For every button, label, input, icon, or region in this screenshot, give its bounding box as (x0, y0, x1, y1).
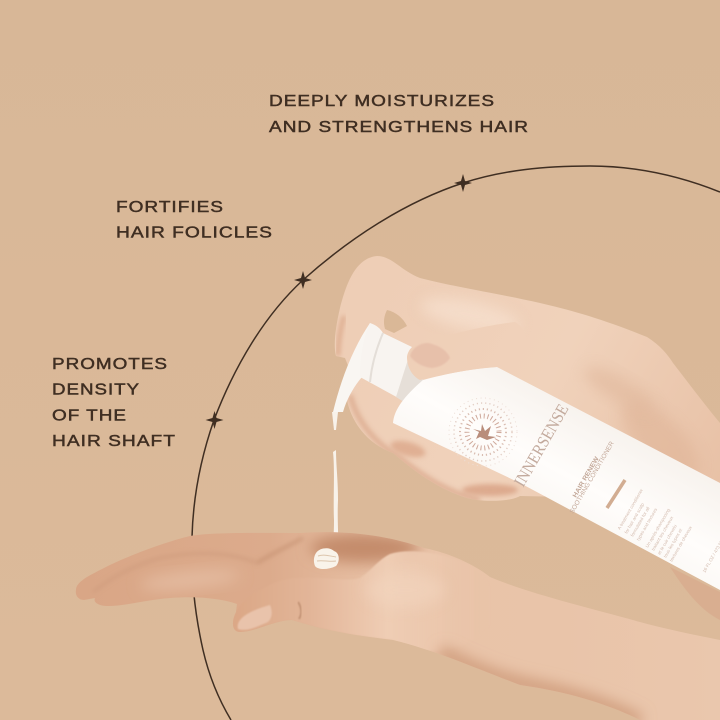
bottle description: A treatment conditioner (617, 487, 644, 530)
star marker: moisturizes (454, 174, 472, 192)
hand shading (424, 298, 514, 330)
bottle description: for hair and scalp (624, 502, 645, 534)
lower arm skin behind bottle (670, 567, 720, 620)
heading: promotes density: HAIR SHAFT (52, 433, 176, 450)
finger highlight (146, 568, 232, 592)
bottle description: et le cuir chevelu (657, 523, 678, 556)
arc line (192, 166, 720, 720)
logo flower (473, 424, 496, 440)
conditioner stream (332, 412, 338, 553)
heading: promotes density: DENSITY (52, 382, 140, 398)
heading: deeply moisturizes: AND STRENGTHENS HAIR (269, 119, 529, 136)
logo burst (449, 398, 517, 466)
upper hand holding bottle (335, 256, 720, 501)
heading: fortifies follicles (116, 199, 273, 242)
lower hand receiving conditioner (76, 532, 720, 720)
finger crease (93, 553, 257, 592)
conditioner bottle (333, 323, 720, 590)
palm shadow (310, 533, 420, 563)
bottle description (617, 487, 720, 574)
bottle description: Un après-shampooing (645, 507, 671, 548)
thumb and thenar mound (343, 550, 428, 646)
pump nozzle (333, 323, 376, 412)
bottle description: textures de cheveux (669, 524, 693, 562)
thumb nail (410, 343, 450, 368)
star marker: follicles (294, 271, 312, 289)
forearm lower shadow (440, 652, 640, 720)
bottle description: traitant les cheveux (651, 515, 675, 552)
bottle description: types and textures (636, 507, 659, 542)
thumb nail (238, 605, 272, 630)
bottle description: tous les types et (663, 527, 683, 558)
heading: promotes density: OF THE (52, 408, 127, 424)
gap between finger and thumb (384, 310, 407, 333)
heading: fortifies follicles: HAIR FOLICLES (116, 224, 273, 242)
conditioner blob (314, 548, 339, 569)
heading: promotes density: PROMOTES (52, 356, 168, 373)
product name: SOOTHING CONDITIONER (569, 440, 616, 515)
heading: promotes density (52, 356, 176, 450)
pump collar (360, 323, 412, 400)
thumb crease (298, 602, 301, 619)
product line: HAIR RENEW (572, 455, 601, 499)
heading: deeply moisturizes (269, 93, 529, 136)
thenar highlight (410, 582, 434, 598)
heading: deeply moisturizes: DEEPLY MOISTURIZES (269, 93, 495, 110)
accent bar (607, 480, 625, 508)
heading: fortifies follicles: FORTIFIES (116, 199, 224, 216)
bottle body (393, 367, 720, 590)
star marker: density (206, 411, 224, 429)
bottle description: formulated for all (630, 506, 651, 538)
brand name: INNERSENSE (510, 401, 572, 490)
benefits arc (192, 166, 720, 720)
thumb pressing bottle (407, 322, 525, 380)
